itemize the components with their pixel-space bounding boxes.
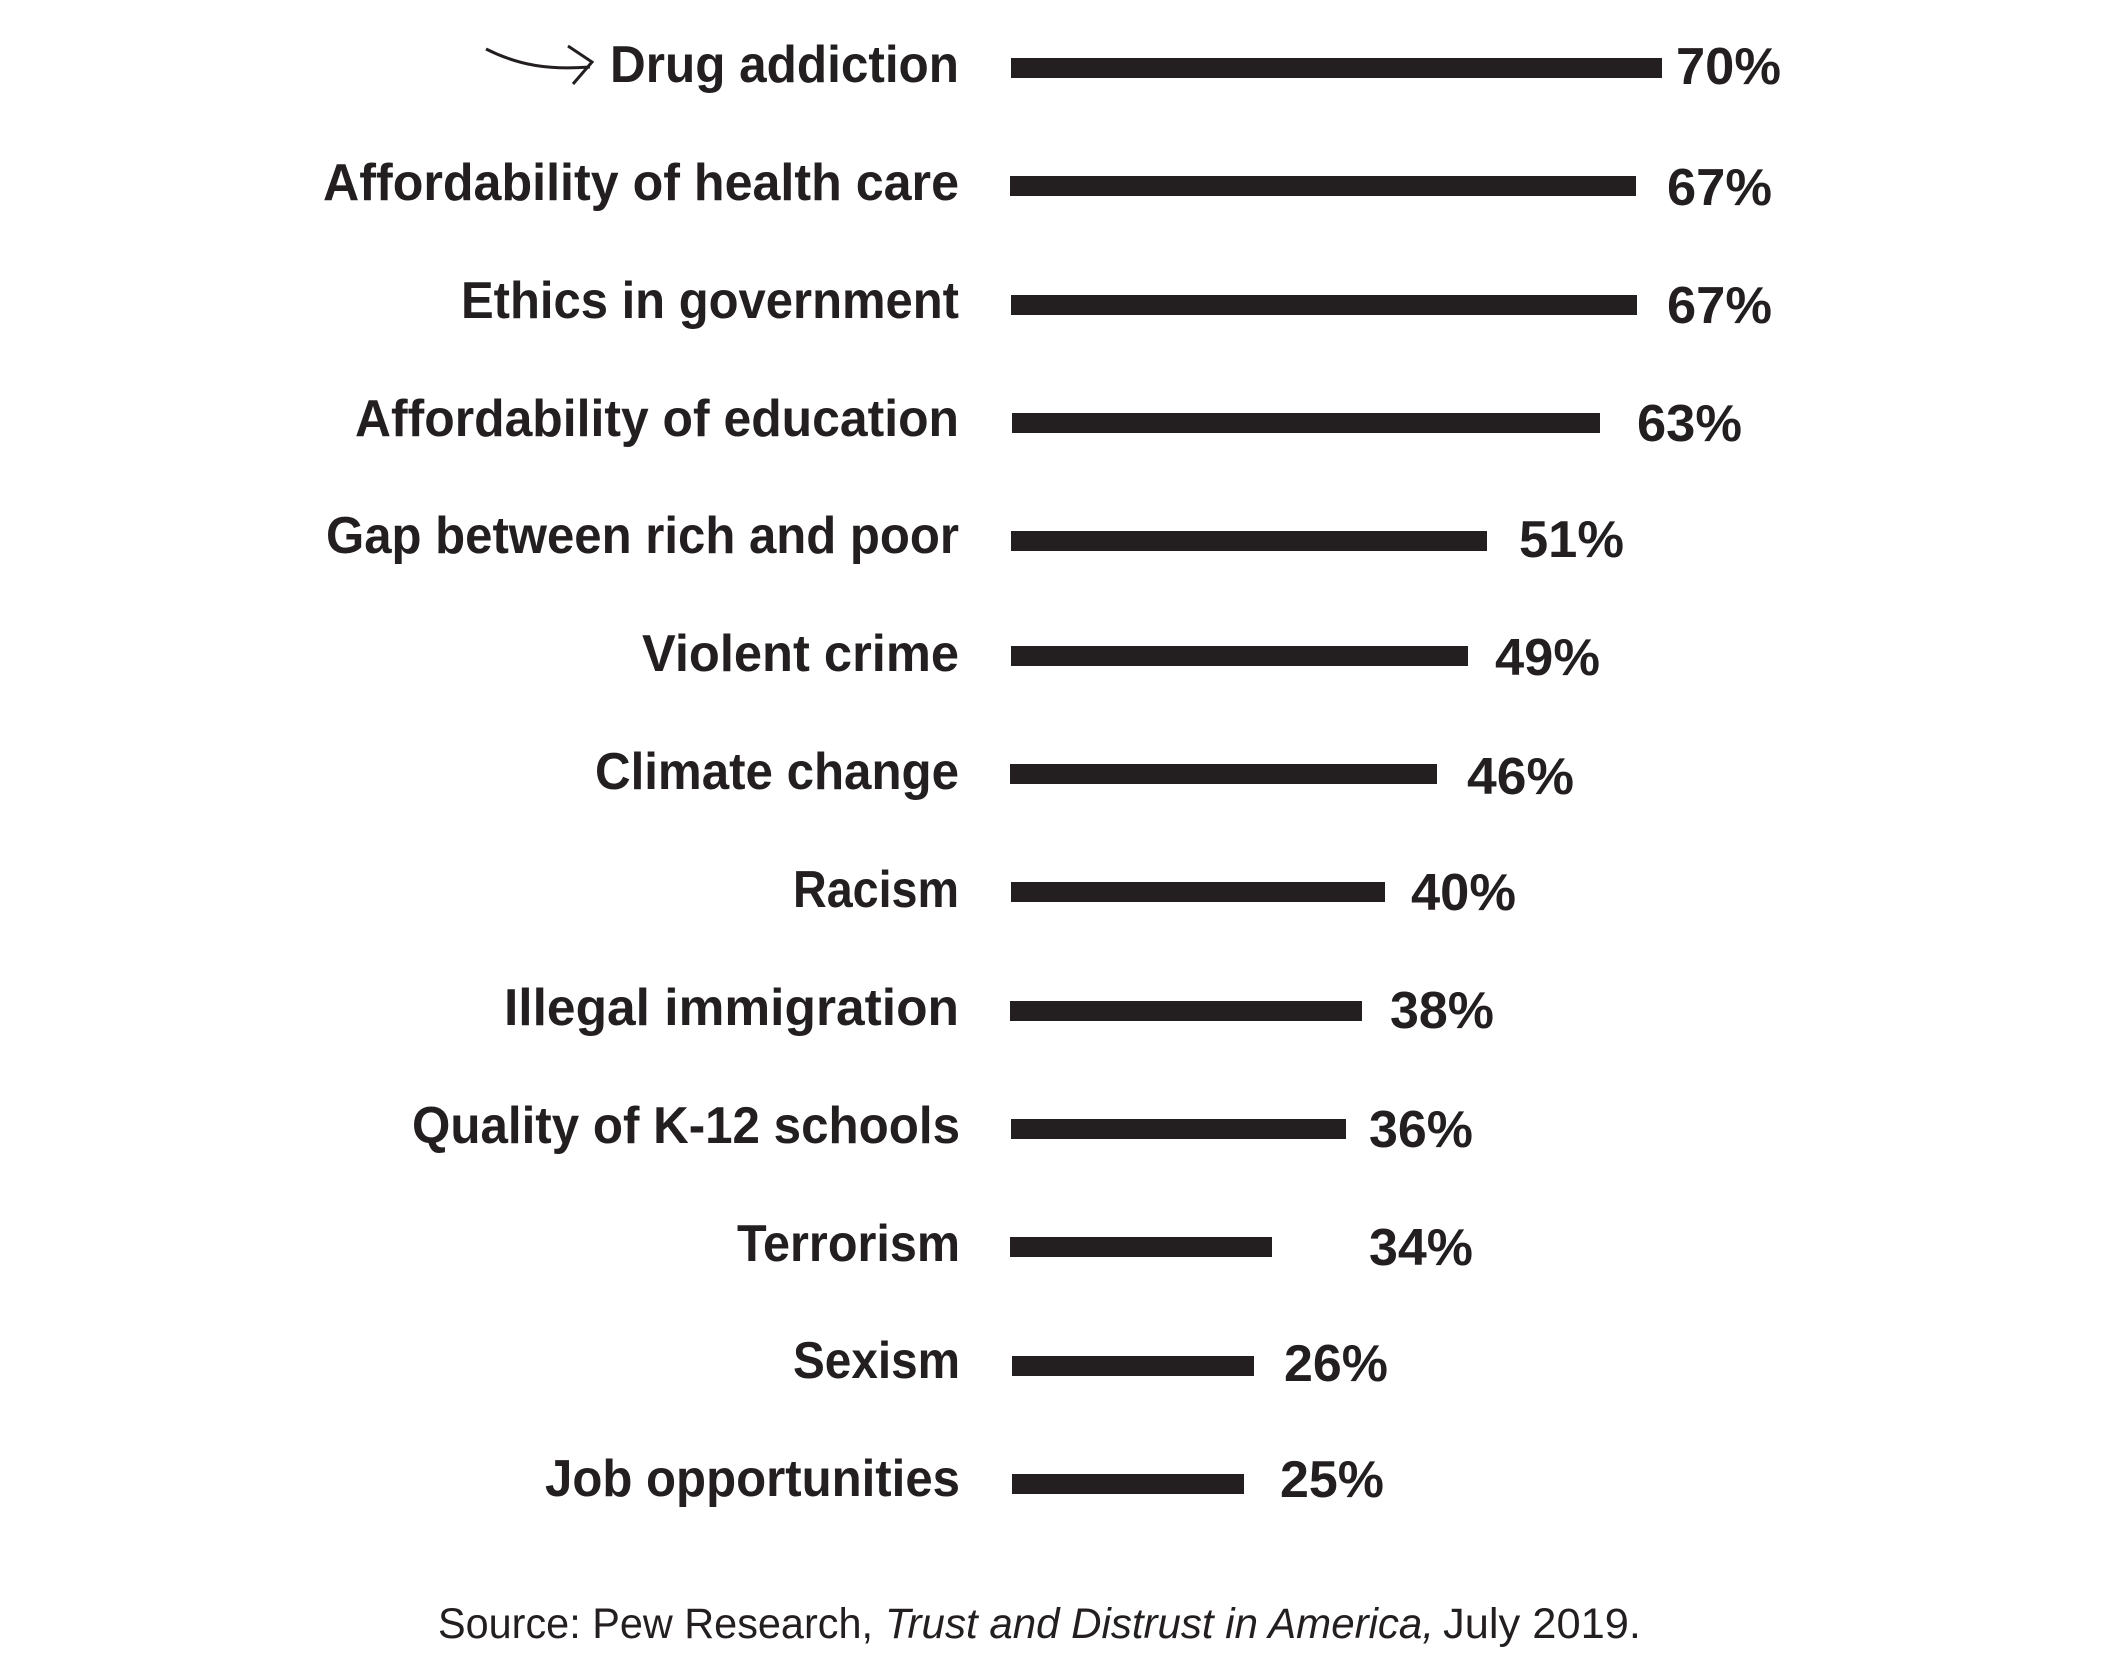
row: Drug addiction 70% <box>610 36 1781 96</box>
row: Illegal immigration 38% <box>504 979 1494 1040</box>
label: Terrorism <box>737 1215 960 1273</box>
bar <box>1011 295 1637 315</box>
label: Violent crime <box>642 625 959 683</box>
bar <box>1011 58 1662 78</box>
bar <box>1012 1356 1254 1376</box>
label: Job opportunities <box>545 1450 960 1508</box>
row: Affordability of health care 67% <box>323 154 1772 217</box>
source note: Trust and Distrust in America, <box>885 1600 1434 1648</box>
source note <box>438 1600 1641 1648</box>
value: 67% <box>1667 159 1772 217</box>
label: Gap between rich and poor <box>326 507 959 565</box>
row: Gap between rich and poor 51% <box>326 507 1624 569</box>
bar <box>1011 1119 1346 1139</box>
label: Affordability of health care <box>323 154 959 212</box>
source note: Source: Pew Research, <box>438 1600 873 1648</box>
row: Climate change 46% <box>595 743 1574 806</box>
bar <box>1011 646 1468 666</box>
label: Quality of K-12 schools <box>412 1097 960 1155</box>
value: 26% <box>1284 1335 1388 1393</box>
label: Illegal immigration <box>504 979 959 1037</box>
bar <box>1010 1001 1362 1021</box>
row: Affordability of education 63% <box>355 390 1742 453</box>
source note: July 2019. <box>1443 1600 1641 1648</box>
row: Sexism 26% <box>793 1332 1388 1393</box>
row: Ethics in government 67% <box>461 272 1772 335</box>
value: 46% <box>1467 748 1574 806</box>
bar <box>1010 1237 1272 1257</box>
value: 25% <box>1280 1451 1384 1509</box>
value: 70% <box>1676 38 1781 96</box>
label: Climate change <box>595 743 959 801</box>
value: 40% <box>1411 864 1516 922</box>
label: Affordability of education <box>355 390 959 448</box>
bar <box>1012 1474 1244 1494</box>
value: 51% <box>1519 511 1624 569</box>
value: 49% <box>1495 629 1600 687</box>
bar <box>1011 882 1385 902</box>
row: Quality of K-12 schools 36% <box>412 1097 1473 1159</box>
icon: curved arrow pointing to Drug addiction <box>486 46 592 84</box>
label: Sexism <box>793 1332 960 1390</box>
bar <box>1012 413 1600 433</box>
row: Terrorism 34% <box>737 1215 1473 1277</box>
value: 63% <box>1637 395 1742 453</box>
bar <box>1010 764 1437 784</box>
value: 34% <box>1369 1219 1473 1277</box>
value: 38% <box>1390 982 1494 1040</box>
value: 36% <box>1369 1101 1473 1159</box>
label: Racism <box>793 861 959 919</box>
bar <box>1010 176 1636 196</box>
row: Violent crime 49% <box>642 625 1600 687</box>
value: 67% <box>1667 277 1772 335</box>
label: Ethics in government <box>461 272 959 330</box>
bar <box>1011 531 1487 551</box>
label: Drug addiction <box>610 36 959 94</box>
row: Job opportunities 25% <box>545 1450 1384 1509</box>
row: Racism 40% <box>793 861 1516 922</box>
